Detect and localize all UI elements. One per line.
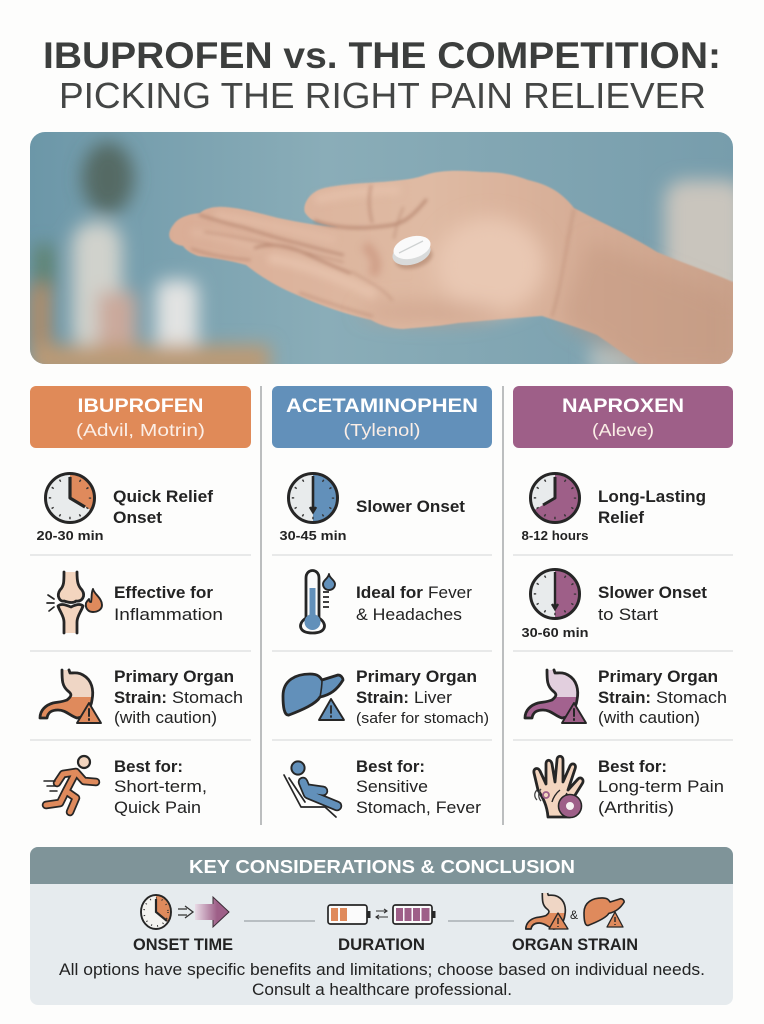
icon: stomach with warning (40, 670, 101, 723)
text: long-lasting relief (598, 488, 706, 527)
panel heading bar (30, 847, 733, 884)
text: long-lasting relief: Relief (598, 509, 645, 527)
header: naproxen: NAPROXEN (562, 396, 684, 417)
finger creases (192, 186, 574, 316)
label: onset time: ONSET TIME (133, 935, 233, 954)
icon: clock 30-60 min (530, 570, 580, 618)
header: acetaminophen (272, 386, 492, 448)
label: 8-12 hours: 8-12 hours (522, 529, 589, 543)
header: acetaminophen: ACETAMINOPHEN (286, 396, 478, 417)
text: slower onset to start (598, 584, 708, 624)
header: acetaminophen: (Tylenol) (344, 420, 420, 440)
icon: arthritic hand (534, 756, 583, 818)
text: organ strain stomach, naproxen (598, 668, 727, 727)
divider line (244, 920, 315, 922)
icon: clock 8-12 hours (530, 474, 580, 522)
text: organ strain stomach (114, 668, 243, 727)
panel heading bar: KEY CONSIDERATIONS & CONCLUSION (189, 856, 575, 877)
icon: reclining person (284, 761, 337, 817)
panel: key considerations and conclusion (30, 847, 733, 1005)
text: best for sensitive stomach: Sensitive (356, 778, 428, 796)
icon: onset clock and arrow (141, 895, 229, 929)
header: ibuprofen: (Advil, Motrin) (76, 420, 205, 440)
text: organ strain liver: Strain: (356, 689, 409, 707)
text: effective for inflammation: Effective for (114, 584, 214, 602)
text: slower onset: Slower Onset (356, 498, 466, 516)
text: effective for inflammation: Inflammation (114, 606, 223, 624)
column dividers (261, 386, 503, 825)
label: 20-30 min: 20-30 min (36, 529, 104, 543)
label: duration: DURATION (338, 935, 425, 954)
conclusion text: All options have specific benefits and limitations; choose based on individual needs. (59, 961, 705, 979)
text: best for short-term: Quick Pain (114, 799, 201, 817)
pill (392, 236, 434, 270)
text: ideal for fever and headaches: Ideal for (356, 584, 424, 602)
text: organ strain liver: (safer for stomach) (356, 710, 489, 727)
text: best for short-term: Short-term, (114, 778, 207, 796)
text: effective for inflammation (114, 584, 223, 624)
text: organ strain stomach: Strain: (114, 689, 167, 707)
icon: runner (44, 756, 96, 812)
icon: clock 30-45 min (288, 474, 338, 522)
icon: stomach with warning, purple (525, 670, 586, 723)
title: PICKING THE RIGHT PAIN RELIEVER (59, 75, 706, 116)
hero photo: hand holding a white pill (30, 132, 745, 375)
text: organ strain stomach: (with caution) (114, 709, 217, 727)
text: slower onset to start: Slower Onset (598, 584, 708, 602)
text: best for long-term pain: (Arthritis) (598, 799, 674, 817)
text: best for long-term pain: Long-term Pain (598, 778, 724, 796)
text: slower onset to start: to Start (598, 606, 658, 624)
header: ibuprofen: IBUPROFEN (78, 396, 204, 417)
text: ideal for fever and headaches (356, 584, 473, 624)
text: quick relief onset: Quick Relief (113, 488, 214, 506)
icon: stomach and liver with warnings (526, 893, 624, 929)
icon: thermometer (301, 570, 335, 633)
text: long-lasting relief: Long-Lasting (598, 488, 706, 506)
row separators (30, 555, 733, 740)
title: IBUPROFEN vs. THE COMPETITION: (43, 35, 721, 76)
text: organ strain liver: Primary Organ (356, 668, 477, 686)
text: best for long-term pain (598, 758, 724, 817)
title (43, 35, 721, 116)
finger shading (270, 191, 382, 296)
text: best for sensitive stomach: Best for: (356, 758, 425, 776)
text: organ strain stomach: Stomach (172, 689, 243, 707)
divider line (448, 920, 514, 922)
conclusion text (59, 961, 705, 999)
text: organ strain stomach, naproxen: (with caution) (598, 709, 700, 727)
icon: inflamed joint (47, 572, 102, 633)
text: organ strain stomach, naproxen: Strain: (598, 689, 651, 707)
text: organ strain liver (356, 668, 489, 727)
text: ideal for fever and headaches: & Headaches (356, 606, 462, 624)
icon: batteries (328, 905, 436, 924)
text: quick relief onset (113, 488, 214, 527)
icon: liver with warning (283, 674, 344, 720)
text: best for short-term (114, 758, 207, 817)
text: quick relief onset: Onset (113, 509, 163, 527)
icon: clock 20-30 min (46, 474, 95, 522)
header: ibuprofen (30, 386, 251, 448)
label: 30-60 min: 30-60 min (522, 626, 588, 640)
conclusion text: Consult a healthcare professional. (252, 981, 512, 999)
text: best for long-term pain: Best for: (598, 758, 667, 776)
text: organ strain stomach: Primary Organ (114, 668, 234, 686)
label: organ strain: ORGAN STRAIN (512, 935, 638, 954)
header: naproxen: (Aleve) (592, 420, 654, 440)
text: best for sensitive stomach: Stomach, Fever (356, 799, 482, 817)
text: organ strain stomach, naproxen: Stomach (656, 689, 727, 707)
label: 30-45 min: 30-45 min (280, 529, 346, 543)
text: best for short-term: Best for: (114, 758, 183, 776)
text: organ strain liver: Liver (414, 689, 453, 707)
text: ideal for fever and headaches: Fever (428, 584, 473, 602)
text: organ strain stomach, naproxen: Primary Organ (598, 668, 718, 686)
text: best for sensitive stomach (356, 758, 482, 817)
hand silhouette (169, 171, 740, 370)
icon: stomach and liver with warnings: & (570, 908, 578, 922)
header: naproxen (513, 386, 733, 448)
